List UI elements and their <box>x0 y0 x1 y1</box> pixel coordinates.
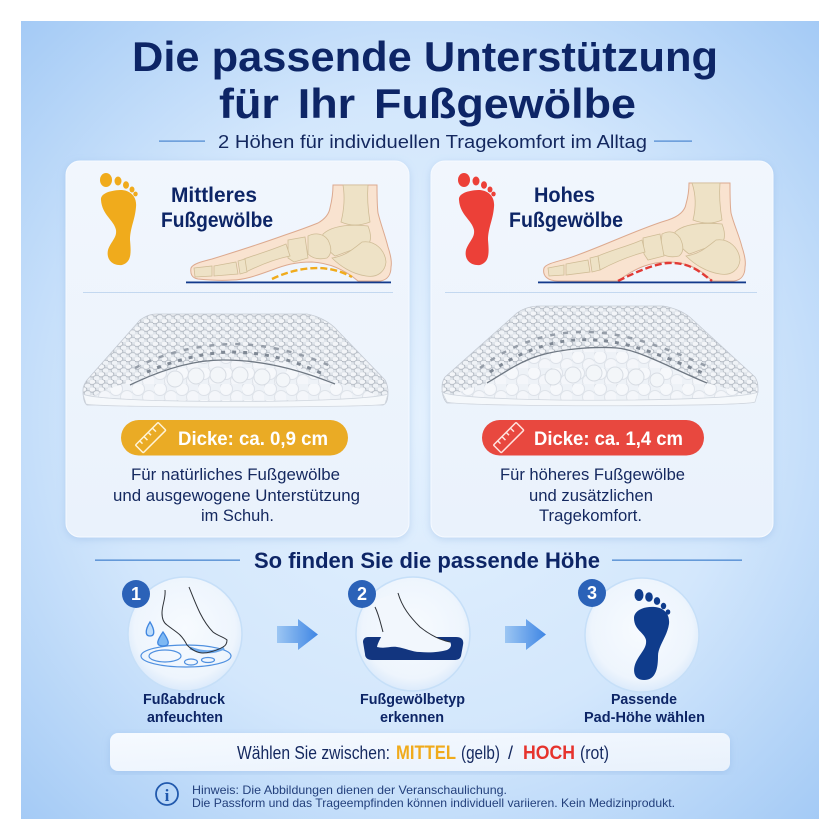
badge 3: 3 <box>587 583 597 603</box>
gel pad: high <box>442 306 758 406</box>
dashed arch: yellow <box>272 268 352 279</box>
heading: Mittleres <box>171 184 257 207</box>
label: anfeuchten <box>147 709 223 726</box>
icon: foot on water <box>141 587 231 667</box>
badge 2: 2 <box>357 584 367 604</box>
heading: Fußgewölbe <box>161 209 273 232</box>
panel: mittleres Fußgewölbe <box>66 161 409 537</box>
label: Fußgewölbetyp <box>360 691 465 708</box>
icon: foot on cushion <box>363 593 463 660</box>
title: für Ihr Fußgewölbe <box>219 80 636 127</box>
heading: Hohes <box>534 184 595 207</box>
description: und ausgewogene Unterstützung <box>113 486 360 505</box>
title <box>132 33 718 127</box>
panel: hohes Fußgewölbe <box>431 161 773 537</box>
choice bar <box>110 733 730 771</box>
icon: red footprint <box>458 173 496 265</box>
description: und zusätzlichen <box>529 486 653 505</box>
choice bar: Wählen Sie zwischen: <box>237 743 390 763</box>
label: Pad-Höhe wählen <box>584 709 705 726</box>
description <box>500 465 685 525</box>
note <box>192 783 675 810</box>
icon: ruler <box>135 422 166 453</box>
choice bar: / <box>508 743 513 763</box>
label <box>143 691 226 726</box>
choice bar: HOCH <box>523 743 575 764</box>
label: Fußabdruck <box>143 691 226 708</box>
foot anatomy illustration <box>186 185 391 283</box>
badge 1 <box>122 580 150 608</box>
dashed arch: red <box>618 263 712 281</box>
section heading: So finden Sie die passende Höhe <box>254 548 600 573</box>
choice bar: MITTEL <box>396 743 456 764</box>
subtitle: 2 Höhen für individuellen Tragekomfort im Alltag <box>218 132 647 152</box>
step 2 <box>348 577 470 726</box>
arrow 1 <box>277 619 318 650</box>
foot anatomy illustration <box>538 183 746 283</box>
gel pad: medium <box>83 314 388 407</box>
step 1 <box>122 577 242 726</box>
label: erkennen <box>380 709 444 726</box>
thickness pill <box>121 420 348 456</box>
thickness pill: Dicke: ca. 0,9 cm <box>178 429 328 450</box>
heading <box>161 184 273 232</box>
description: Für natürliches Fußgewölbe <box>131 465 340 484</box>
choice bar: (gelb) <box>461 743 500 763</box>
note: Hinweis: Die Abbildungen dienen der Veranschaulichung. <box>192 783 507 797</box>
badge 1: 1 <box>131 584 141 604</box>
icon: yellow footprint <box>100 173 138 265</box>
step 3 <box>578 578 705 726</box>
label: Passende <box>611 691 677 708</box>
icon: info: i <box>165 786 170 805</box>
icon: ruler <box>493 422 524 453</box>
description: Für höheres Fußgewölbe <box>500 465 685 484</box>
description: im Schuh. <box>201 506 274 525</box>
thickness pill <box>482 420 704 456</box>
badge 3 <box>578 579 606 607</box>
label <box>584 691 705 726</box>
description <box>113 465 360 525</box>
thickness pill: Dicke: ca. 1,4 cm <box>534 429 683 450</box>
icon: blue footprint <box>634 589 670 680</box>
icon: info <box>156 783 178 805</box>
note: Die Passform und das Trageempfinden können individuell variieren. Kein Medizinprodukt. <box>192 796 675 810</box>
heading <box>509 184 623 232</box>
label <box>360 691 465 726</box>
heading: Fußgewölbe <box>509 209 623 232</box>
arrow 2 <box>505 619 546 650</box>
choice bar: (rot) <box>580 743 609 763</box>
title: Die passende Unterstützung <box>132 33 718 80</box>
badge 2 <box>348 580 376 608</box>
description: Tragekomfort. <box>539 506 642 525</box>
